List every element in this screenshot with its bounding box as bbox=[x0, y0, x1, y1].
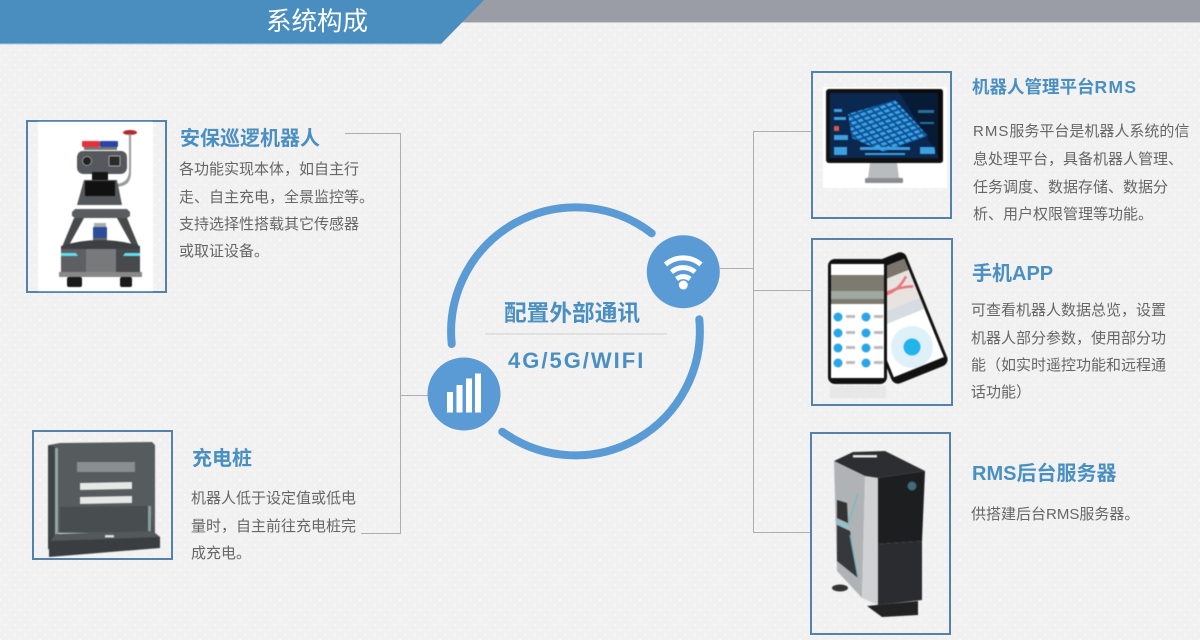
description: 能（如实时遥控功能和远程通 bbox=[971, 357, 1166, 374]
description bbox=[191, 490, 356, 562]
description: 或取证设备。 bbox=[179, 243, 269, 260]
description: 话功能） bbox=[971, 384, 1031, 401]
icon: robot bbox=[59, 130, 142, 287]
icon: charging pile bbox=[48, 442, 160, 557]
heading: 机器人管理平台RMS bbox=[972, 77, 1137, 97]
text block: RMS server bbox=[971, 462, 1139, 523]
title: 系统构成 bbox=[266, 8, 368, 36]
icon: signal bars bbox=[428, 358, 500, 430]
center subheading: 4G/5G/WIFI bbox=[508, 348, 645, 373]
ring arcs bbox=[451, 207, 700, 455]
center heading: 配置外部通讯 bbox=[504, 300, 640, 326]
description bbox=[973, 123, 1189, 223]
description: 量时，自主前往充电桩完 bbox=[191, 515, 356, 536]
icon: monitor bbox=[826, 89, 943, 183]
description: 任务调度、数据存储、数据分 bbox=[973, 179, 1168, 196]
description: 各功能实现本体，如自主行 bbox=[179, 158, 359, 179]
header banner bbox=[0, 0, 1200, 44]
icon: wifi bbox=[647, 235, 720, 308]
description: 机器人部分参数，使用部分功 bbox=[971, 327, 1166, 348]
diagram: external communication ring bbox=[428, 203, 720, 460]
description: 析、用户权限管理等功能。 bbox=[973, 206, 1153, 223]
description bbox=[971, 299, 1166, 401]
panel: mobile app image bbox=[811, 238, 953, 406]
description: 支持选择性搭载其它传感器 bbox=[179, 216, 359, 233]
text block: security robot bbox=[179, 128, 374, 260]
icon: server tower bbox=[832, 451, 925, 617]
panel: server image bbox=[810, 432, 951, 635]
description: 成充电。 bbox=[191, 545, 251, 562]
description: 走、自主充电，全景监控等。 bbox=[179, 186, 374, 207]
text block: mobile app bbox=[971, 262, 1166, 401]
heading: RMS后台服务器 bbox=[972, 463, 1116, 485]
description: 机器人低于设定值或低电 bbox=[191, 490, 356, 507]
text block: RMS platform bbox=[972, 77, 1189, 223]
panel: charging pile image bbox=[32, 430, 173, 560]
panel: security robot image bbox=[26, 120, 167, 293]
description: 息处理平台，具备机器人管理、 bbox=[973, 148, 1183, 169]
heading: 安保巡逻机器人 bbox=[180, 128, 320, 150]
description: 供搭建后台RMS服务器。 bbox=[971, 506, 1139, 523]
heading: 充电桩 bbox=[192, 448, 252, 470]
description: 可查看机器人数据总览，设置 bbox=[971, 299, 1166, 320]
text block: charging pile bbox=[191, 448, 356, 562]
panel: RMS monitor image bbox=[811, 71, 952, 219]
description bbox=[179, 158, 374, 260]
divider bbox=[485, 333, 667, 335]
description: RMS服务平台是机器人系统的信 bbox=[973, 123, 1189, 140]
heading: 手机APP bbox=[972, 263, 1053, 285]
icon: phones bbox=[828, 250, 950, 398]
